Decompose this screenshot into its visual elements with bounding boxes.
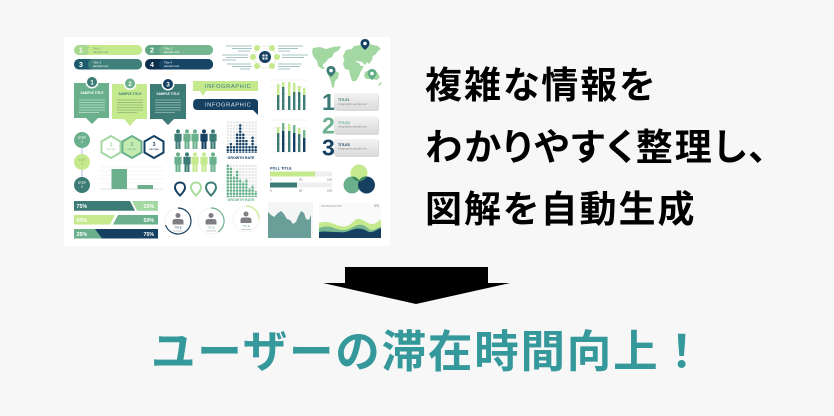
numbered title tabs: Infographic sample text [338, 124, 367, 128]
numbered title tabs: TITLE2 [338, 121, 350, 125]
numbered pill banners: sample text [93, 50, 109, 54]
sample title cards: SAMPLE TITLE [118, 92, 142, 96]
numbered pill banners [74, 45, 213, 70]
hexagon badges [102, 136, 164, 158]
numbered pill banners: sample text [164, 64, 180, 68]
step timeline: 3 [81, 162, 83, 166]
dot matrix growth rate navy [226, 121, 257, 160]
down arrow [323, 267, 510, 304]
progress ring profiles: TITLE [174, 226, 182, 230]
people pictogram rows [174, 129, 217, 172]
small column chart [100, 167, 163, 189]
progress ring profiles: TITLE [207, 226, 215, 230]
infographic ribbons: INFOGRAPHIC [205, 84, 251, 90]
numbered title tabs: 3 [322, 134, 335, 160]
numbered pill banners: sample text [93, 64, 109, 68]
layered wave chart [319, 203, 381, 238]
hexagon badges: 1 [110, 142, 113, 148]
percentage split bars: 25% [76, 232, 87, 238]
numbered pill banners: 1 [79, 48, 83, 54]
poll chart [270, 166, 332, 192]
poll chart: 0 [270, 178, 272, 182]
step timeline: 4 [81, 140, 83, 144]
percentage split bars: 50% [144, 218, 154, 224]
step timeline: STEP [78, 158, 86, 162]
numbered title tabs: TITLE3 [338, 143, 350, 147]
numbered title tabs: Infographic sample text [338, 102, 367, 106]
numbered pill banners: sample text [164, 50, 180, 54]
infographic ribbons [193, 81, 258, 115]
numbered pill banners: 4 [150, 62, 154, 69]
poll chart: 100 [327, 188, 332, 192]
step timeline: STEP [78, 181, 86, 185]
location pin outlines [175, 182, 216, 196]
hexagon badges: 3 [153, 142, 156, 148]
step timeline [74, 132, 90, 193]
numbered title tabs: TITLE1 [338, 98, 350, 102]
poll chart: 0 [270, 188, 272, 192]
infographic ribbons: INFOGRAPHIC [205, 103, 251, 109]
percentage split bars: 75% [144, 232, 154, 238]
numbered title tabs: Infographic sample text [338, 146, 367, 150]
poll chart: 50 [299, 188, 303, 192]
percentage split bars [74, 201, 158, 238]
poll chart: POLL TITLE [270, 166, 292, 170]
conclusion heading: ユーザーの滞在時間向上！ [151, 328, 706, 377]
layered wave chart: INFOGRAPHIC [321, 204, 343, 208]
central hub diagram [222, 45, 308, 69]
world map [312, 44, 382, 88]
dot matrix growth rate navy: GROWTH RATE [228, 156, 255, 160]
sample title cards: 2 [128, 81, 132, 88]
numbered title tabs: 1 [322, 89, 335, 115]
map pins [326, 39, 376, 80]
hexagon badges: sample [149, 147, 159, 151]
percentage split bars: 25% [144, 204, 154, 210]
infographic sample panel [64, 37, 390, 246]
sample title cards: 1 [90, 80, 94, 86]
sample title cards: 3 [166, 82, 170, 88]
step timeline: 2 [81, 185, 83, 189]
headline text block: 複雑な情報を [425, 65, 657, 106]
numbered pill banners: 3 [79, 62, 83, 69]
sample title cards: SAMPLE TITLE [80, 91, 104, 95]
hexagon badges: sample [127, 147, 137, 151]
sample title cards [74, 76, 186, 126]
dot matrix growth rate green: GROWTH RATE [228, 198, 255, 202]
progress ring profiles: TITLE [242, 224, 250, 228]
percentage split bars: 50% [76, 218, 87, 224]
numbered pill banners: 2 [150, 48, 154, 54]
area chart [268, 202, 313, 238]
numbered pill banners: Title 4 [164, 60, 172, 64]
venn diagram [344, 164, 375, 194]
numbered title tabs: 2 [322, 112, 335, 138]
step timeline: STEP [78, 136, 86, 140]
numbered pill banners: Title 2 [164, 46, 172, 50]
headline text block: 図解を自動生成 [425, 189, 696, 230]
poll chart: 100 [327, 178, 332, 182]
numbered pill banners: Title 3 [93, 60, 101, 64]
progress ring profiles [165, 206, 259, 234]
hexagon badges: sample [106, 147, 116, 151]
hexagon badges: 2 [131, 142, 134, 148]
stacked bar chart 1 [270, 80, 308, 110]
numbered title tabs [322, 89, 379, 160]
headline text block: わかりやすく整理し、 [425, 127, 769, 168]
headline text block [425, 65, 769, 230]
dot matrix growth rate green [226, 164, 257, 202]
numbered pill banners: Title 1 [93, 46, 101, 50]
layered wave chart: 5% [374, 204, 379, 208]
sample title cards: SAMPLE TITLE [156, 92, 180, 96]
stacked bar chart 2 [270, 120, 308, 152]
percentage split bars: 75% [76, 204, 87, 210]
poll chart: 50 [299, 178, 303, 182]
